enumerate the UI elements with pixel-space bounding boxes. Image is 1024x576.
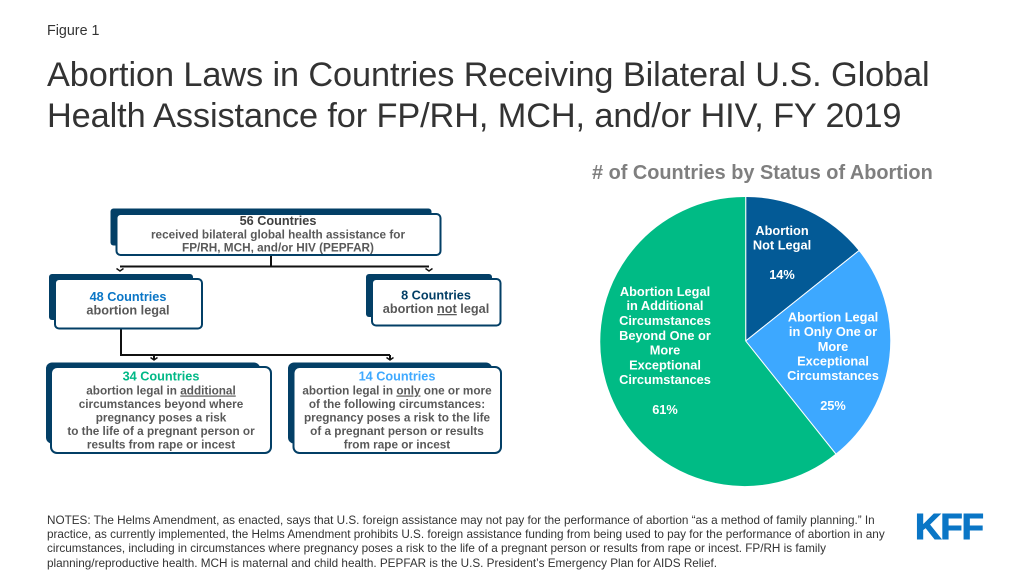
slice: legal in additional circumstances 61% — [600, 196, 836, 486]
box: 56 countries — [110, 208, 440, 255]
pie chart heading: # of Countries by Status of Abortion — [592, 162, 933, 184]
box: 48 countries: 48 Countries — [90, 290, 166, 304]
slice: legal in only one or more 25%: in Only One or — [789, 324, 877, 339]
connector: top split — [116, 255, 432, 271]
slice: abortion not legal 14%: Abortion — [755, 223, 809, 238]
slice: legal in additional circumstances 61%: Circumstances — [619, 372, 711, 387]
slice: legal in only one or more 25% — [746, 250, 891, 454]
slice: legal in only one or more 25%: 25% — [820, 398, 846, 413]
notes: NOTES: The Helms Amendment, as enacted, says that U.S. foreign assistance may not pay for the performance of abortion “as a method of family planning.” In — [47, 514, 875, 526]
figure label: Figure 1 — [47, 23, 99, 39]
box: 14 countries: from rape or incest — [344, 438, 450, 452]
box: 56 countries: FP/RH, MCH, and/or HIV (PEPFAR) — [182, 242, 374, 254]
KFF logo: KFF — [915, 506, 983, 546]
notes — [47, 514, 885, 570]
box: 14 countries — [288, 362, 501, 453]
title — [47, 56, 930, 135]
slice: abortion not legal 14%: Not Legal — [753, 238, 811, 252]
box: 34 countries: circumstances beyond where — [79, 398, 244, 411]
box: 14 countries: of the following circumstances: — [309, 398, 485, 411]
box: 34 countries: to the life of a pregnant person or — [67, 425, 255, 438]
slice: legal in only one or more 25%: Circumstances — [787, 368, 879, 383]
box: 34 countries: pregnancy poses a risk — [96, 412, 227, 424]
flowchart — [46, 208, 501, 453]
notes: planning/reproductive health. MCH is maternal and child health. PEPFAR is the U.S. President’s Emergency Plan for AIDS Relief. — [47, 557, 717, 570]
slice: legal in additional circumstances 61%: in Additional — [626, 298, 704, 313]
box: 8 countries: 8 Countries — [401, 288, 471, 302]
slice: legal in additional circumstances 61%: Beyond One or — [619, 328, 711, 343]
box: 8 countries — [366, 274, 500, 326]
title: Abortion Laws in Countries Receiving Bilateral U.S. Global — [47, 56, 930, 94]
slice: abortion not legal 14%: 14% — [769, 267, 795, 282]
connector: legal split — [121, 329, 394, 360]
slice: legal in additional circumstances 61%: 61% — [652, 402, 678, 417]
slice: legal in only one or more 25%: More — [818, 339, 848, 354]
notes: circumstances, including in circumstances where pregnancy poses a risk to the life of a pregnant person or results from rape or incest. FP/RH is family — [47, 542, 826, 555]
box: 34 countries: 34 Countries — [123, 370, 199, 384]
box: 34 countries: results from rape or incest — [87, 438, 235, 452]
pie chart — [600, 196, 891, 486]
box: 34 countries — [46, 362, 271, 453]
box: 48 countries — [49, 274, 202, 328]
slice: legal in only one or more 25%: Abortion Legal — [788, 310, 878, 324]
slice: legal in additional circumstances 61%: Circumstances — [619, 313, 711, 328]
box: 48 countries: abortion legal — [86, 304, 170, 318]
box: 14 countries: 14 Countries — [359, 370, 435, 384]
box: 8 countries: abortion not legal — [383, 302, 489, 316]
slice: legal in additional circumstances 61%: Exceptional — [629, 358, 701, 372]
box: 56 countries: 56 Countries — [240, 214, 316, 228]
slice: legal in additional circumstances 61%: More — [650, 342, 680, 358]
slice: legal in additional circumstances 61%: Abortion Legal — [620, 284, 710, 299]
box: 34 countries: abortion legal in additional — [86, 384, 236, 398]
title: Health Assistance for FP/RH, MCH, and/or HIV, FY 2019 — [47, 97, 901, 135]
slice: legal in only one or more 25%: Exceptional — [797, 354, 869, 368]
box: 14 countries: pregnancy poses a risk to the life — [304, 412, 491, 424]
notes: practice, as currently implemented, the Helms Amendment prohibits U.S. foreign assistance funding from being used to pay for the performance of abortion in any — [47, 528, 885, 541]
box: 14 countries: of a pregnant person or results — [310, 425, 484, 438]
slice: abortion not legal 14% — [746, 196, 859, 341]
box: 14 countries: abortion legal in only one or more — [302, 384, 492, 398]
box: 56 countries: received bilateral global health assistance for — [151, 228, 405, 242]
